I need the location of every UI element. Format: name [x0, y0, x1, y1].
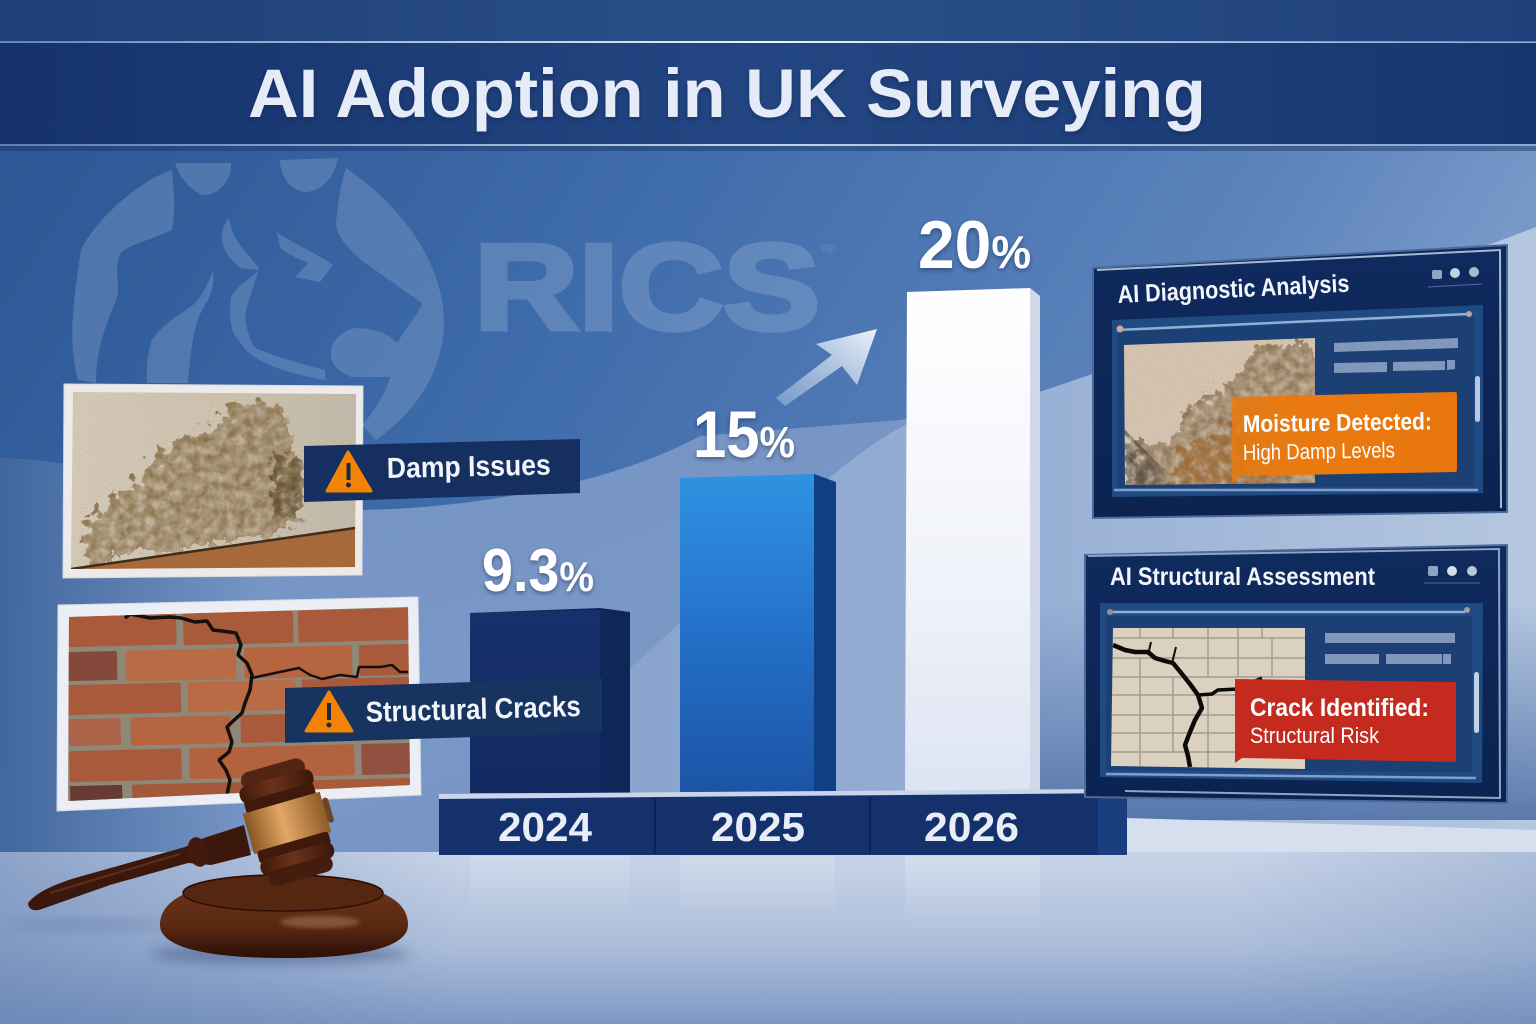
base with year labels	[439, 789, 1127, 855]
bar chart	[439, 207, 1127, 855]
gavel sound block	[160, 874, 408, 958]
callout: moisture detected: High Damp Levels	[1243, 437, 1395, 465]
bar: 2026	[905, 288, 1040, 792]
callout: moisture detected	[1232, 392, 1457, 483]
base with year labels: 2024	[498, 804, 592, 850]
gavel head	[232, 753, 347, 890]
watermark: RICS wordmark: ®	[822, 241, 837, 256]
tag: Structural Cracks	[285, 678, 602, 743]
label: 15%: 15%	[693, 397, 795, 471]
photo: cracked brick wall	[57, 597, 421, 811]
placeholder text lines	[1334, 338, 1458, 373]
panel: AI Diagnostic Analysis	[1093, 245, 1507, 518]
tag: Structural Cracks: Structural Cracks	[365, 691, 581, 729]
window controls	[1428, 267, 1482, 287]
panel: AI Structural Assessment	[1085, 545, 1507, 803]
panel heading: AI Diagnostic Analysis	[1117, 270, 1350, 309]
bar: 2024	[470, 608, 630, 793]
title: AI Adoption in UK Surveying	[248, 55, 1206, 132]
header band	[0, 0, 1536, 151]
arrow: upward trend	[776, 329, 877, 406]
tag: Damp Issues	[304, 439, 580, 502]
icon: warning triangle	[306, 692, 352, 731]
window controls	[1424, 566, 1480, 583]
tag: Damp Issues: Damp Issues	[386, 450, 551, 485]
scan image: crack	[1108, 625, 1308, 771]
panel heading: AI Structural Assessment	[1110, 563, 1376, 591]
inner screen	[1100, 603, 1483, 783]
inner screen	[1112, 305, 1483, 497]
photo: damp wall	[63, 384, 363, 578]
gavel handle	[28, 825, 251, 910]
gavel	[10, 753, 410, 964]
floor	[0, 852, 1536, 1024]
watermark: RICS wordmark: RICS	[474, 219, 820, 355]
callout: crack identified: Structural Risk	[1250, 723, 1380, 748]
label: 20%: 20%	[918, 207, 1031, 283]
scan image: damp	[1124, 338, 1315, 485]
callout: crack identified: Crack Identified:	[1250, 694, 1429, 722]
callout: moisture detected: Moisture Detected:	[1243, 408, 1432, 438]
icon: warning triangle	[327, 452, 371, 491]
base with year labels: 2026	[924, 804, 1019, 850]
label: 9.3%: 9.3%	[482, 537, 594, 604]
placeholder text lines	[1325, 633, 1455, 664]
watermark: RICS lion logo	[72, 158, 444, 440]
bar: 2025	[680, 474, 836, 792]
base with year labels: 2025	[711, 804, 805, 850]
callout: crack identified	[1235, 679, 1456, 763]
